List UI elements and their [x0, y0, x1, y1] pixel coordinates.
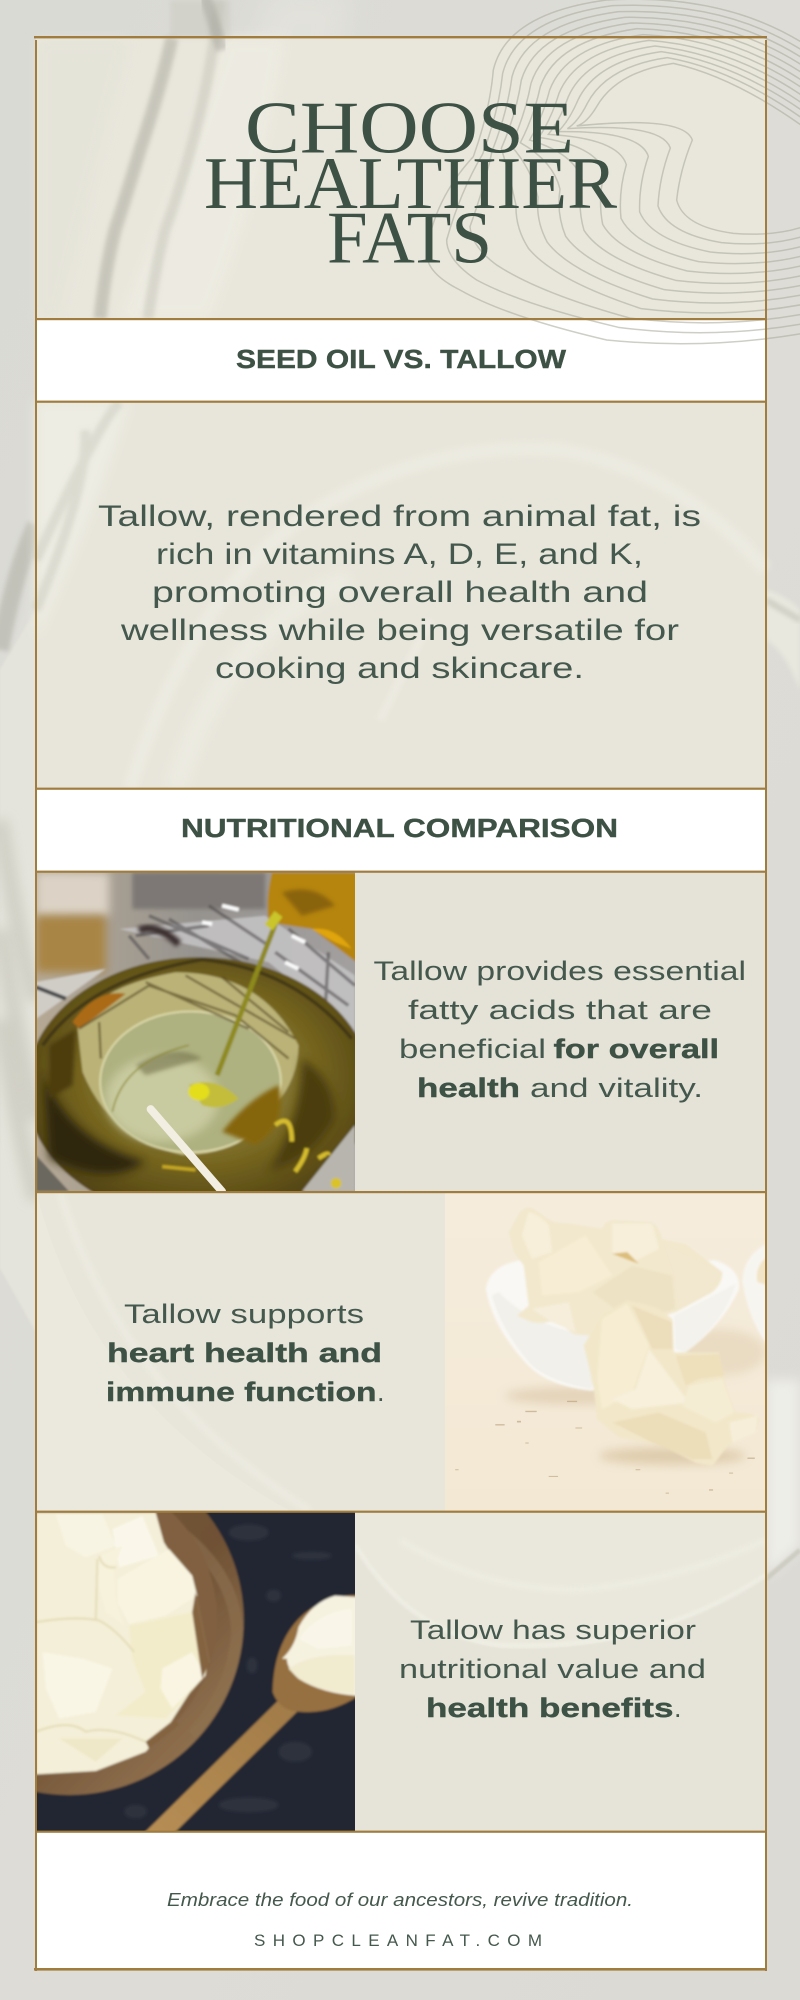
text block: row two: immune function — [106, 1377, 376, 1407]
decorative contour lines — [427, 0, 800, 344]
image: rendered tallow in wooden bowl with spoon — [37, 1512, 355, 1831]
panel: row one text background — [355, 872, 766, 1192]
title — [204, 88, 618, 280]
panel: intro text background — [36, 402, 766, 788]
text block: intro paragraph: rich in vitamins A, D, E, and K, — [156, 538, 643, 571]
heading: seed oil vs tallow: SEED OIL VS. TALLOW — [236, 344, 567, 374]
text block: row one — [374, 956, 746, 1103]
text block: row two: . — [377, 1377, 385, 1407]
panel: section heading band nutritional comparison — [36, 788, 766, 872]
text block: intro paragraph: cooking and skincare. — [215, 652, 584, 685]
image: oil pouring into pot — [37, 872, 355, 1191]
text block: row three: Tallow has superior — [410, 1615, 696, 1645]
heading: nutritional comparison: NUTRITIONAL COMPARISON — [181, 813, 618, 843]
text block: intro paragraph — [98, 500, 701, 685]
text block: row two: heart health and — [107, 1338, 382, 1368]
panel: title background — [36, 38, 766, 319]
footer tagline: Embrace the food of our ancestors, revive tradition. — [167, 1890, 633, 1910]
title: HEALTHIER — [204, 143, 618, 225]
text block: row one: health — [417, 1073, 520, 1103]
panel: section heading band seed oil vs tallow — [36, 319, 766, 402]
text block: row one: and vitality. — [530, 1073, 703, 1103]
title: FATS — [327, 198, 492, 280]
text block: row three: health benefits — [426, 1693, 674, 1723]
panel: row two text background — [36, 1192, 445, 1511]
text block: row one: Tallow provides essential — [374, 956, 746, 986]
text block: row three: nutritional value and — [399, 1654, 706, 1684]
text block: intro paragraph: Tallow, rendered from animal fat, is — [98, 500, 701, 533]
text block: row three — [399, 1615, 706, 1723]
footer website: SHOPCLEANFAT.COM — [254, 1931, 542, 1950]
text block: intro paragraph: promoting overall health and — [152, 576, 648, 609]
text block: row two: Tallow supports — [124, 1299, 364, 1329]
text block: row three: . — [674, 1693, 682, 1723]
title: CHOOSE — [245, 88, 574, 170]
text block: row two — [106, 1299, 385, 1407]
text block: row one: beneficial — [399, 1034, 546, 1064]
text block: row one: fatty acids that are — [408, 995, 712, 1025]
text block: intro paragraph: wellness while being versatile for — [120, 614, 679, 647]
panel: footer band — [36, 1832, 766, 1969]
image: tallow chunks in white bowl — [445, 1193, 765, 1510]
panel: row three text background — [355, 1512, 766, 1832]
text block: row one: for overall — [554, 1034, 719, 1064]
